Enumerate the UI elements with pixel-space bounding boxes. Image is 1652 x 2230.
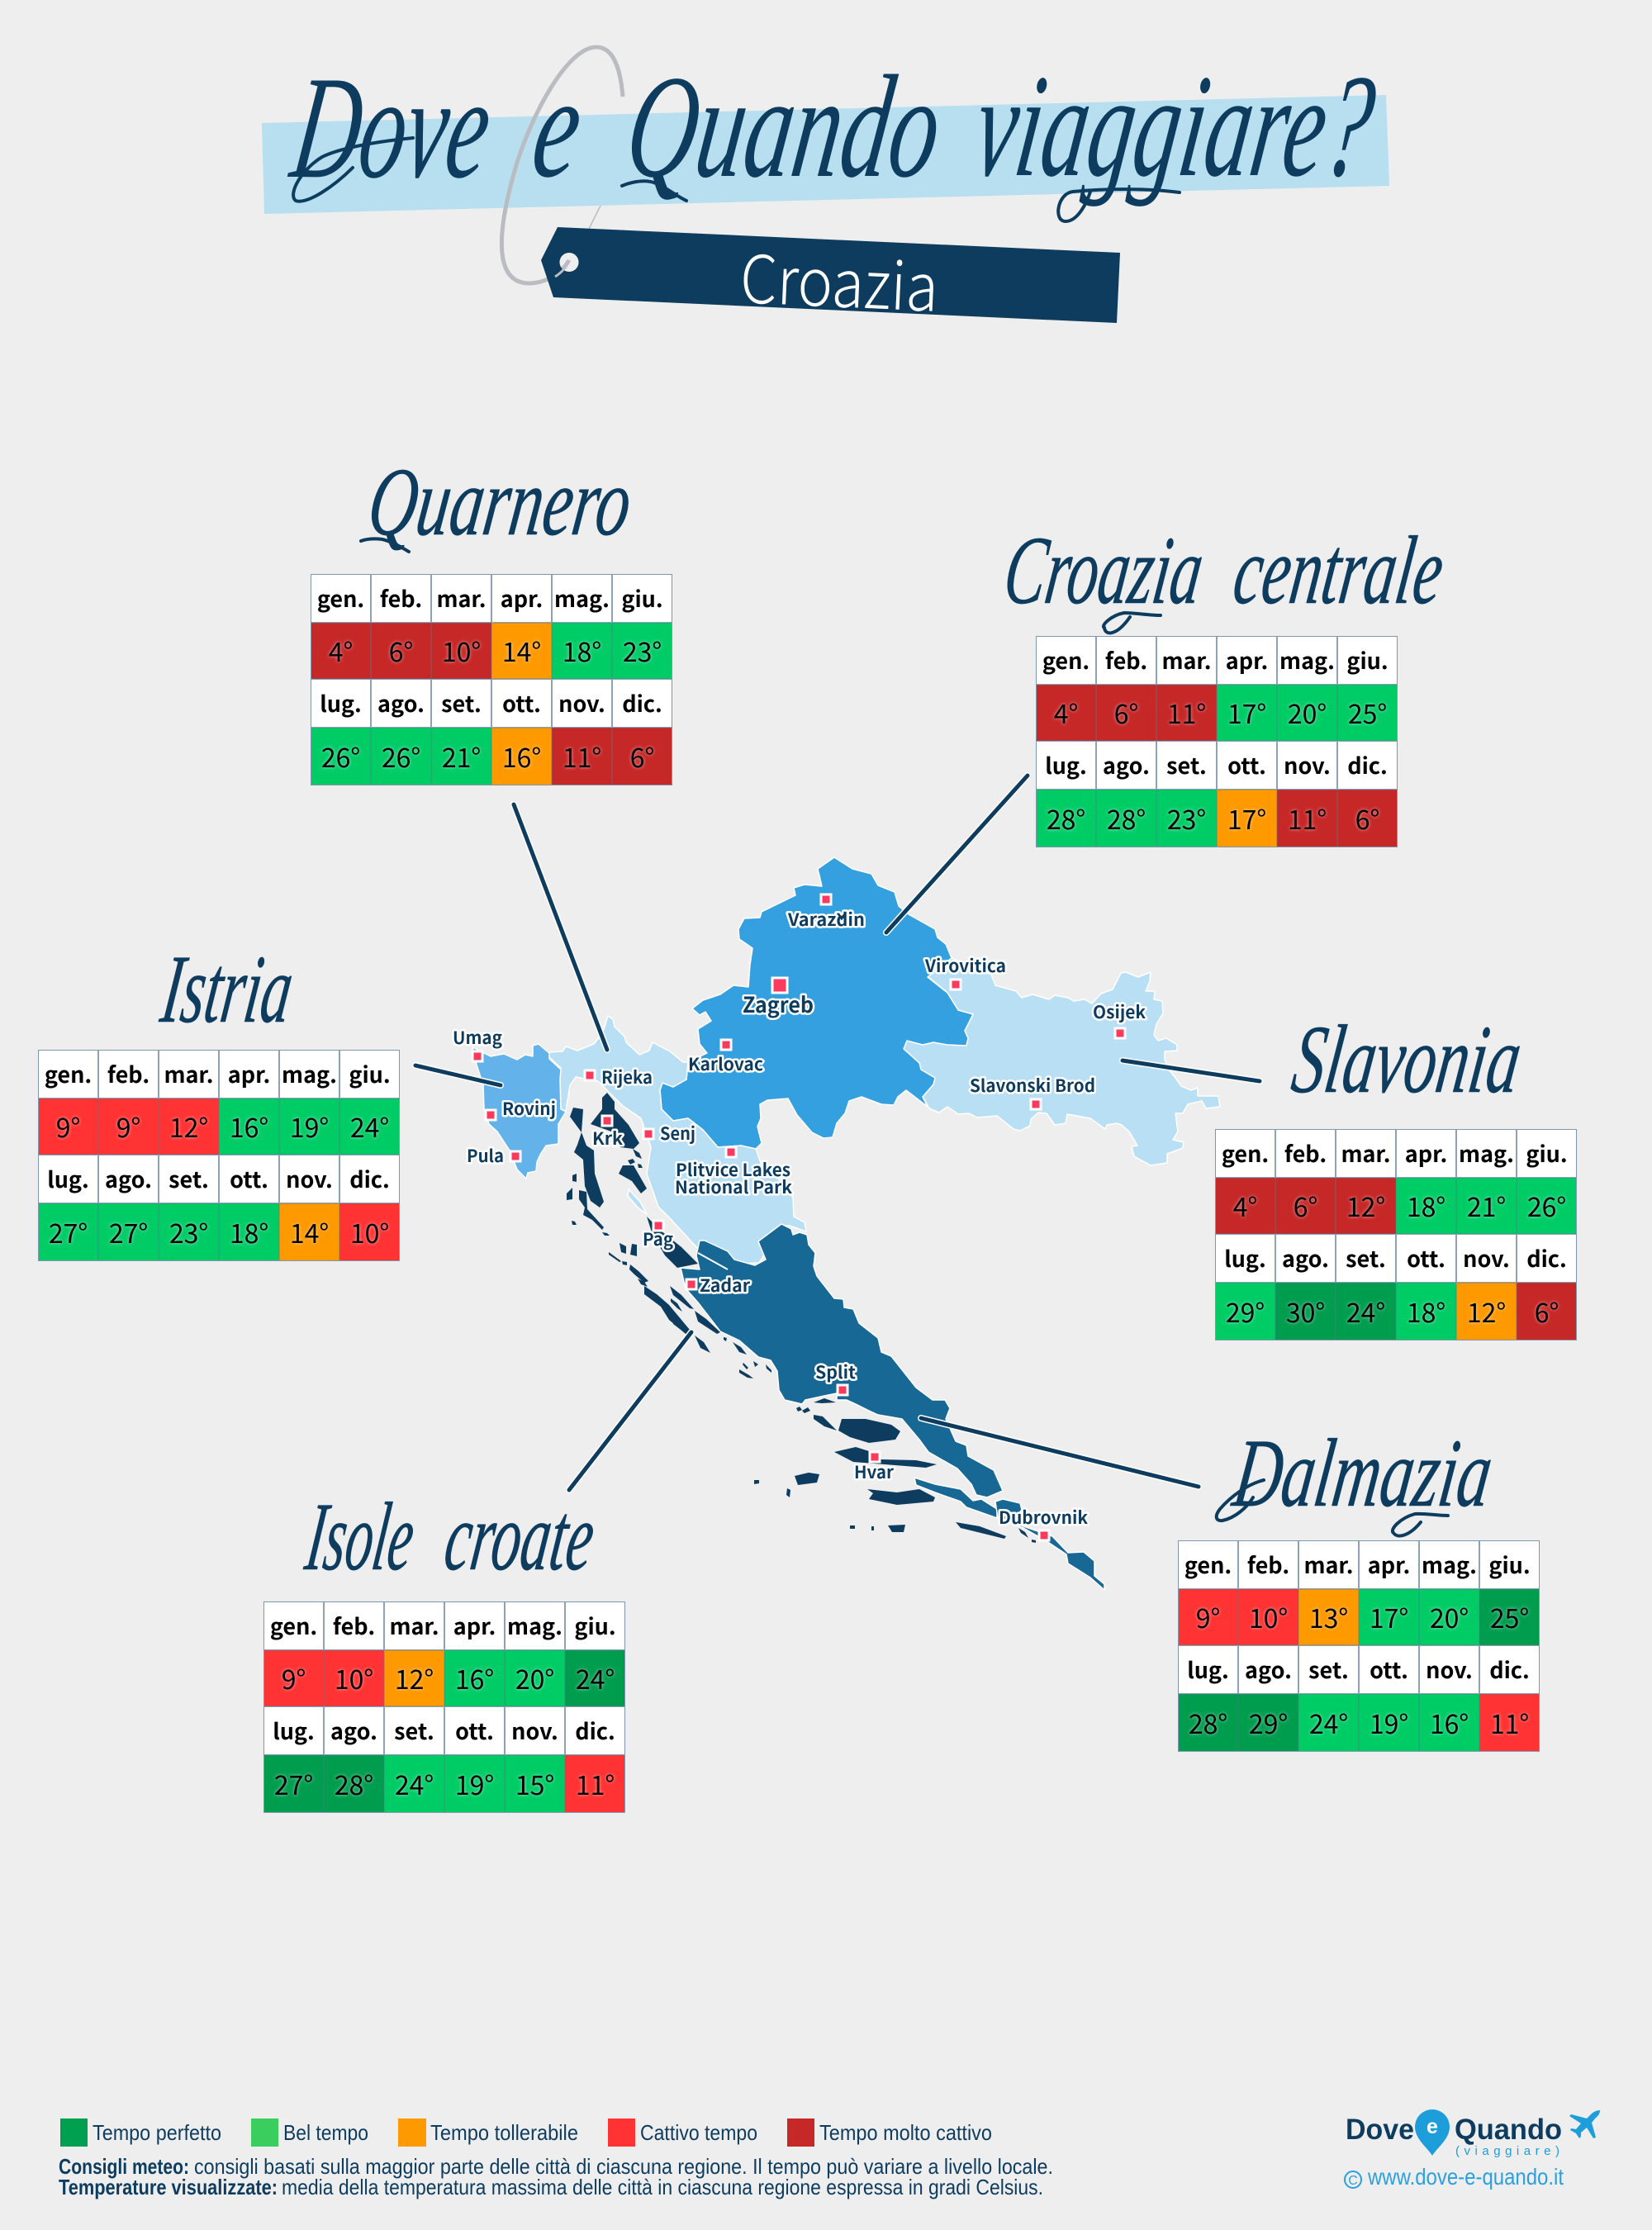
- table: Slavonia: 18°: [1407, 1293, 1446, 1331]
- label Rovinj: Rovinj: [502, 1096, 556, 1121]
- table: Dalmazia: 29°: [1249, 1704, 1288, 1742]
- line outline: [1123, 1060, 1260, 1081]
- table: Dalmazia: set.: [1308, 1652, 1349, 1685]
- label Pula: Pula: [467, 1143, 504, 1168]
- country tag: [541, 226, 1120, 331]
- marker: Krk: [602, 1116, 612, 1126]
- table: Croazia centrale: ago.: [1103, 748, 1150, 780]
- island: Lastovo: [888, 1525, 905, 1532]
- logo tagline: ( v i a g g i a r e ): [1455, 2144, 1559, 2158]
- table: Quarnero: 26°: [382, 738, 420, 776]
- table: Istria: 24°: [350, 1108, 389, 1146]
- island: Vis: [795, 1473, 819, 1485]
- leader line: Dalmazia: [921, 1418, 1199, 1487]
- heading swashes: [1217, 1480, 1448, 1536]
- line core: [514, 804, 607, 1050]
- table: Croazia centrale: 20°: [1288, 694, 1327, 732]
- table: Quarnero: lug.: [320, 686, 362, 719]
- island: Ciovo: [814, 1398, 836, 1403]
- island: Rab: [619, 1165, 647, 1193]
- marker: Zagreb: [772, 978, 787, 993]
- note text media: media della temperatura massima delle città in ciascuna regione espressa in gradi Celsius.: [282, 2175, 1043, 2199]
- island: Mljet: [956, 1522, 1006, 1539]
- legend: [60, 2118, 992, 2147]
- swatch Cattivo tempo: [608, 2118, 635, 2147]
- table: Croazia centrale: 23°: [1167, 799, 1206, 837]
- table: Istria: 27°: [49, 1213, 88, 1251]
- marker: Hvar: [870, 1452, 880, 1462]
- label Plitvice Lakes: Plitvice Lakes: [676, 1157, 790, 1182]
- table: Dalmazia: apr.: [1368, 1548, 1410, 1579]
- word Croazia: Croazia: [998, 516, 1210, 624]
- heading: Croazia centrale: [998, 516, 1450, 633]
- table: Slavonia: 26°: [1527, 1187, 1566, 1225]
- banner band: [262, 95, 1389, 214]
- island: Ugljan: [695, 1311, 720, 1334]
- heading swash: [361, 539, 409, 552]
- header: title banner: [262, 45, 1389, 283]
- table: Slavonia: lug.: [1224, 1241, 1266, 1274]
- table: Croazia centrale: mar.: [1161, 643, 1212, 676]
- island: Losinj: [579, 1190, 604, 1230]
- table: Istria: 12°: [169, 1108, 208, 1146]
- small islands: [567, 1149, 1036, 1543]
- table: Croazia centrale: 28°: [1047, 799, 1085, 837]
- label Pag: Pag: [643, 1226, 673, 1251]
- region: Istria: [472, 1044, 566, 1179]
- table: Quarnero: dic.: [622, 686, 662, 719]
- table: Isole croate: 9°: [282, 1659, 306, 1697]
- table: Dalmazia: mar.: [1303, 1548, 1354, 1579]
- website url: www.dove-e-quando.it: [1367, 2164, 1564, 2190]
- heading word: Quarnero: [362, 448, 638, 556]
- logo pin: [1415, 2109, 1450, 2156]
- label Senj: Senj: [660, 1121, 695, 1146]
- table: Croazia centrale: apr.: [1226, 643, 1268, 676]
- word centrale: centrale: [1227, 516, 1450, 624]
- table: Dalmazia: [1178, 1540, 1540, 1752]
- logo pin letter: e: [1427, 2115, 1438, 2138]
- marker: Varazdin: [821, 894, 831, 904]
- table: Isole croate: dic.: [575, 1713, 615, 1746]
- table: Quarnero: ago.: [377, 686, 425, 719]
- island: Brac: [838, 1419, 900, 1443]
- table: Croazia centrale: ott.: [1227, 748, 1266, 780]
- table: Dalmazia: gen.: [1184, 1548, 1232, 1579]
- table: Isole croate: 27°: [274, 1765, 313, 1803]
- table: Quarnero: 16°: [502, 738, 541, 776]
- table: Slavonia: 18°: [1407, 1187, 1446, 1225]
- table: Isole croate: mag.: [507, 1609, 563, 1640]
- Peljesac peninsula: [914, 1478, 997, 1518]
- table: Quarnero: gen.: [317, 581, 364, 613]
- table: Istria: 16°: [230, 1108, 268, 1146]
- table: Istria: 9°: [56, 1108, 80, 1146]
- swatch Tempo molto cattivo: [787, 2118, 814, 2147]
- table: Dalmazia: ott.: [1370, 1652, 1408, 1685]
- islands: [567, 1093, 1036, 1543]
- table: Slavonia: nov.: [1463, 1241, 1510, 1274]
- country name: Croazia: [738, 226, 941, 331]
- table: Croazia centrale: 17°: [1227, 799, 1266, 837]
- table: Quarnero: 26°: [321, 738, 360, 776]
- label Slavonski Brod: Slavonski Brod: [970, 1073, 1095, 1098]
- legend text Tempo molto cattivo: Tempo molto cattivo: [819, 2120, 992, 2145]
- table: Istria: apr.: [228, 1057, 270, 1089]
- table: Istria: [38, 1050, 400, 1261]
- legend text Tempo perfetto: Tempo perfetto: [93, 2120, 221, 2145]
- table: Dalmazia: 10°: [1249, 1598, 1288, 1636]
- label Virovitica: Virovitica: [924, 953, 1006, 978]
- table: Dalmazia: giu.: [1488, 1548, 1531, 1579]
- table: Quarnero: [311, 574, 672, 785]
- table: Slavonia: set.: [1346, 1241, 1386, 1274]
- table: Croazia centrale: 28°: [1107, 799, 1146, 837]
- island: Cres: [570, 1108, 604, 1208]
- table: Slavonia: 4°: [1233, 1187, 1257, 1225]
- table: Quarnero: 6°: [389, 632, 413, 670]
- table: Quarnero: 23°: [623, 632, 662, 670]
- tag shape: [541, 227, 1120, 323]
- marker: Karlovac: [721, 1040, 731, 1050]
- marker: Rovinj: [486, 1110, 496, 1120]
- table: Dalmazia: 9°: [1196, 1598, 1220, 1636]
- table: Dalmazia: feb.: [1247, 1548, 1289, 1579]
- table: Isole croate: gen.: [270, 1609, 317, 1640]
- table: Istria: gen.: [45, 1057, 92, 1089]
- region: Slavonia: [904, 958, 1220, 1165]
- line core: [921, 1418, 1199, 1487]
- label Zagreb: Zagreb: [743, 989, 814, 1019]
- table: Croazia centrale: 4°: [1054, 694, 1078, 732]
- marker: Slavonski Brod: [1031, 1099, 1041, 1109]
- legend text Bel tempo: Bel tempo: [283, 2120, 368, 2145]
- table: Isole croate: ott.: [455, 1713, 494, 1746]
- table: Istria: ago.: [105, 1161, 152, 1194]
- table: Istria: 9°: [116, 1108, 140, 1146]
- line core: [1123, 1060, 1260, 1081]
- table: Slavonia: 6°: [1535, 1293, 1559, 1331]
- table: Istria: giu.: [349, 1057, 391, 1089]
- table: Istria: 18°: [230, 1213, 268, 1251]
- label Dubrovnik: Dubrovnik: [999, 1505, 1088, 1530]
- table: Quarnero: 18°: [563, 632, 601, 670]
- table: Slavonia: feb.: [1284, 1136, 1327, 1168]
- table: Isole croate: lug.: [273, 1713, 315, 1746]
- table: Slavonia: 12°: [1346, 1187, 1385, 1225]
- table: Slavonia: apr.: [1405, 1136, 1447, 1168]
- marker: Dubrovnik: [1039, 1530, 1049, 1540]
- table: Quarnero: apr.: [501, 581, 543, 613]
- table: Istria: lug.: [47, 1161, 89, 1194]
- logo plane icon: [1569, 2110, 1600, 2138]
- table: Quarnero: 10°: [442, 632, 481, 670]
- table: Dalmazia: ago.: [1245, 1652, 1292, 1685]
- Velebit channel: [698, 1253, 728, 1269]
- table: Isole croate: [263, 1601, 625, 1813]
- luggage tag string loop: [501, 47, 623, 283]
- table: Croazia centrale: dic.: [1347, 748, 1388, 780]
- table: Dalmazia: 17°: [1370, 1598, 1408, 1636]
- leader line: Slavonia: [1123, 1060, 1260, 1081]
- table: Isole croate: nov.: [511, 1713, 558, 1746]
- table: Isole croate: 24°: [576, 1659, 615, 1697]
- table: Dalmazia: 16°: [1430, 1704, 1469, 1742]
- table: Istria: ott.: [230, 1161, 268, 1194]
- line outline: [569, 1332, 691, 1490]
- string end in tag hole: [555, 260, 569, 277]
- label Split: Split: [815, 1359, 856, 1384]
- label Hvar: Hvar: [854, 1459, 895, 1484]
- city markers: [472, 894, 1125, 1540]
- note label Temperature visualizzate: Temperature visualizzate:: [59, 2175, 278, 2199]
- swatch Bel tempo: [251, 2118, 278, 2147]
- line core: [569, 1332, 691, 1490]
- table: Quarnero: 21°: [442, 738, 481, 776]
- table: Istria: mag.: [282, 1057, 337, 1089]
- label Rijeka: Rijeka: [601, 1065, 653, 1089]
- copyright letter: C: [1348, 2174, 1358, 2188]
- table: Croazia centrale: 6°: [1114, 694, 1138, 732]
- note text consigli: consigli basati sulla maggior parte delle città di ciascuna regione. Il tempo può variare a livello locale.: [194, 2154, 1053, 2179]
- island: Dugi Otok: [644, 1286, 690, 1334]
- line core: [886, 776, 1028, 932]
- city labels: [453, 907, 1146, 1530]
- island: Korcula: [867, 1489, 935, 1505]
- table: Isole croate: 28°: [335, 1765, 373, 1803]
- Pag coastal strip: [628, 1189, 647, 1214]
- swatch Tempo tollerabile: [398, 2118, 426, 2147]
- table: Quarnero: mar.: [436, 581, 487, 613]
- word croate: croate: [439, 1483, 601, 1591]
- label Krk: Krk: [592, 1126, 623, 1151]
- copyright circle: [1345, 2171, 1361, 2188]
- table: Croazia centrale: set.: [1166, 748, 1207, 780]
- island: Pag: [647, 1217, 698, 1268]
- table: Dalmazia: 19°: [1370, 1704, 1408, 1742]
- island: Zirje: [733, 1342, 747, 1355]
- table: Quarnero: 11°: [563, 738, 601, 776]
- table: Slavonia: 24°: [1346, 1293, 1385, 1331]
- logo: [1345, 2109, 1600, 2190]
- table: Croazia centrale: 6°: [1355, 799, 1379, 837]
- table: Isole croate: 20°: [515, 1659, 554, 1697]
- table: Quarnero: 14°: [502, 632, 541, 670]
- marker: Zadar: [686, 1279, 696, 1289]
- table: Istria: 27°: [109, 1213, 148, 1251]
- table: Isole croate: 11°: [576, 1765, 615, 1803]
- leader line: Quarnero: [514, 804, 607, 1050]
- table: Isole croate: apr.: [453, 1609, 496, 1640]
- heading: Quarnero: [361, 448, 638, 556]
- marker: Pag: [653, 1221, 663, 1231]
- legend text Tempo tollerabile: Tempo tollerabile: [430, 2120, 578, 2145]
- label Zadar: Zadar: [700, 1273, 751, 1298]
- table: Isole croate: 19°: [455, 1765, 494, 1803]
- marker: Senj: [643, 1129, 653, 1139]
- table: Quarnero: mag.: [554, 581, 610, 613]
- table: Isole croate: 12°: [395, 1659, 434, 1697]
- island: Iz: [670, 1286, 694, 1309]
- table: Croazia centrale: 11°: [1167, 694, 1206, 732]
- table: Quarnero: feb.: [380, 581, 422, 613]
- line outline: [415, 1065, 501, 1085]
- table: Quarnero: set.: [441, 686, 482, 719]
- table: Dalmazia: 20°: [1430, 1598, 1469, 1636]
- leader line: Croazia centrale: [886, 776, 1028, 932]
- table: Dalmazia: lug.: [1187, 1652, 1229, 1685]
- island: Solta: [814, 1415, 837, 1431]
- heading word: Dalmazia: [1227, 1419, 1499, 1527]
- table: Isole croate: 16°: [455, 1659, 494, 1697]
- table: Istria: 10°: [350, 1213, 389, 1251]
- table: Croazia centrale: lug.: [1045, 748, 1087, 780]
- table: Istria: dic.: [349, 1161, 390, 1194]
- label Umag: Umag: [453, 1025, 502, 1050]
- table: Slavonia: ago.: [1282, 1241, 1329, 1274]
- table: Slavonia: 21°: [1467, 1187, 1506, 1225]
- table: Slavonia: [1215, 1129, 1577, 1340]
- table: Croazia centrale: giu.: [1346, 643, 1389, 676]
- table: Istria: set.: [169, 1161, 209, 1194]
- table: Slavonia: ott.: [1407, 1241, 1446, 1274]
- word Isole: Isole: [300, 1483, 421, 1591]
- leader line: Isole croate: [569, 1332, 691, 1490]
- table: Istria: nov.: [286, 1161, 333, 1194]
- table: Quarnero: nov.: [558, 686, 605, 719]
- table: Istria: mar.: [164, 1057, 214, 1089]
- island: Krk: [591, 1093, 639, 1149]
- marker: Umag: [472, 1051, 482, 1061]
- table: Croazia centrale: [1036, 636, 1398, 847]
- marker: Virovitica: [951, 980, 961, 989]
- marker: Pula: [510, 1151, 520, 1161]
- Dubrovnik coast: [995, 1499, 1104, 1590]
- logo text Quando: Quando: [1455, 2114, 1562, 2146]
- logo text Dove: Dove: [1346, 2114, 1414, 2146]
- table: Dalmazia: dic.: [1489, 1652, 1530, 1685]
- line outline: [921, 1418, 1199, 1487]
- label National Park: National Park: [675, 1174, 792, 1199]
- map of Croatia: [472, 857, 1220, 1590]
- label Varazdin: Varaždin: [787, 907, 865, 932]
- table: Istria: feb.: [107, 1057, 150, 1089]
- marker: Split: [838, 1385, 847, 1395]
- table: Croazia centrale: 11°: [1288, 799, 1327, 837]
- region: Croazia centrale: [660, 857, 973, 1149]
- title word Dove: Dove: [282, 46, 501, 209]
- table: Dalmazia: 11°: [1490, 1704, 1529, 1742]
- note label Consigli meteo: Consigli meteo:: [59, 2154, 189, 2179]
- table: Slavonia: giu.: [1526, 1136, 1568, 1168]
- title word e: e: [525, 45, 591, 208]
- table: Slavonia: dic.: [1526, 1241, 1567, 1274]
- table: Slavonia: 30°: [1286, 1293, 1325, 1331]
- title calligraphic swashes: [293, 138, 1180, 221]
- table: Croazia centrale: mag.: [1279, 643, 1335, 676]
- table: Istria: 14°: [290, 1213, 329, 1251]
- table: Slavonia: mag.: [1459, 1136, 1514, 1168]
- marker: Osijek: [1115, 1028, 1125, 1038]
- label Karlovac: Karlovac: [688, 1051, 763, 1076]
- leader line: Istria: [415, 1065, 501, 1085]
- table: Croazia centrale: gen.: [1042, 643, 1089, 676]
- heading: Slavonia: Slavonia: [1286, 1005, 1528, 1113]
- table: Dalmazia: 24°: [1309, 1704, 1348, 1742]
- table: Quarnero: ott.: [502, 686, 541, 719]
- table: Dalmazia: nov.: [1426, 1652, 1473, 1685]
- heading swash: [1104, 613, 1161, 633]
- heading: Istria: Istria: [155, 935, 300, 1043]
- table: Dalmazia: 28°: [1189, 1704, 1227, 1742]
- table: Dalmazia: 13°: [1309, 1598, 1348, 1636]
- line outline: [886, 776, 1028, 932]
- table: Dalmazia: 25°: [1490, 1598, 1529, 1636]
- label Osijek: Osijek: [1093, 999, 1146, 1024]
- table: Dalmazia: mag.: [1422, 1548, 1477, 1579]
- thin tag string: [589, 206, 601, 229]
- marker: Rijeka: [585, 1070, 595, 1080]
- table: Isole croate: 15°: [515, 1765, 554, 1803]
- marker: Plitvice: [726, 1147, 736, 1157]
- table: Slavonia: gen.: [1222, 1136, 1269, 1168]
- table: Quarnero: giu.: [621, 581, 663, 613]
- table: Isole croate: feb.: [333, 1609, 375, 1640]
- title word Quando: Quando: [618, 45, 951, 208]
- notes: [59, 2154, 1053, 2199]
- heading: Isole croate: [300, 1483, 601, 1591]
- table: Istria: 19°: [290, 1108, 329, 1146]
- table: Slavonia: 29°: [1226, 1293, 1265, 1331]
- legend text Cattivo tempo: Cattivo tempo: [640, 2120, 757, 2145]
- region: Dalmazia: [681, 1224, 1003, 1497]
- table: Quarnero: 6°: [630, 738, 654, 776]
- swatch Tempo perfetto: [60, 2118, 88, 2147]
- table: Isole croate: ago.: [330, 1713, 377, 1746]
- island: Hvar: [834, 1447, 937, 1468]
- table: Croazia centrale: feb.: [1105, 643, 1147, 676]
- table: Slavonia: 6°: [1294, 1187, 1317, 1225]
- table: Isole croate: set.: [394, 1713, 434, 1746]
- table: Croazia centrale: 17°: [1227, 694, 1266, 732]
- line outline: [514, 804, 607, 1050]
- island: Kornat: [695, 1336, 710, 1353]
- line core: [415, 1065, 501, 1085]
- region: Quarnero: [549, 1016, 806, 1264]
- table: Isole croate: 24°: [395, 1765, 434, 1803]
- table: Istria: 23°: [169, 1213, 208, 1251]
- table: Croazia centrale: 25°: [1348, 694, 1387, 732]
- table: Isole croate: 10°: [335, 1659, 373, 1697]
- table: Slavonia: mar.: [1341, 1136, 1391, 1168]
- table: Croazia centrale: nov.: [1284, 748, 1331, 780]
- table: Isole croate: giu.: [574, 1609, 616, 1640]
- table: Slavonia: 12°: [1467, 1293, 1506, 1331]
- table: Isole croate: mar.: [389, 1609, 439, 1640]
- title word viaggiare: viaggiare?: [966, 45, 1384, 207]
- heading: Dalmazia: [1217, 1419, 1499, 1536]
- table: Quarnero: 4°: [329, 632, 353, 670]
